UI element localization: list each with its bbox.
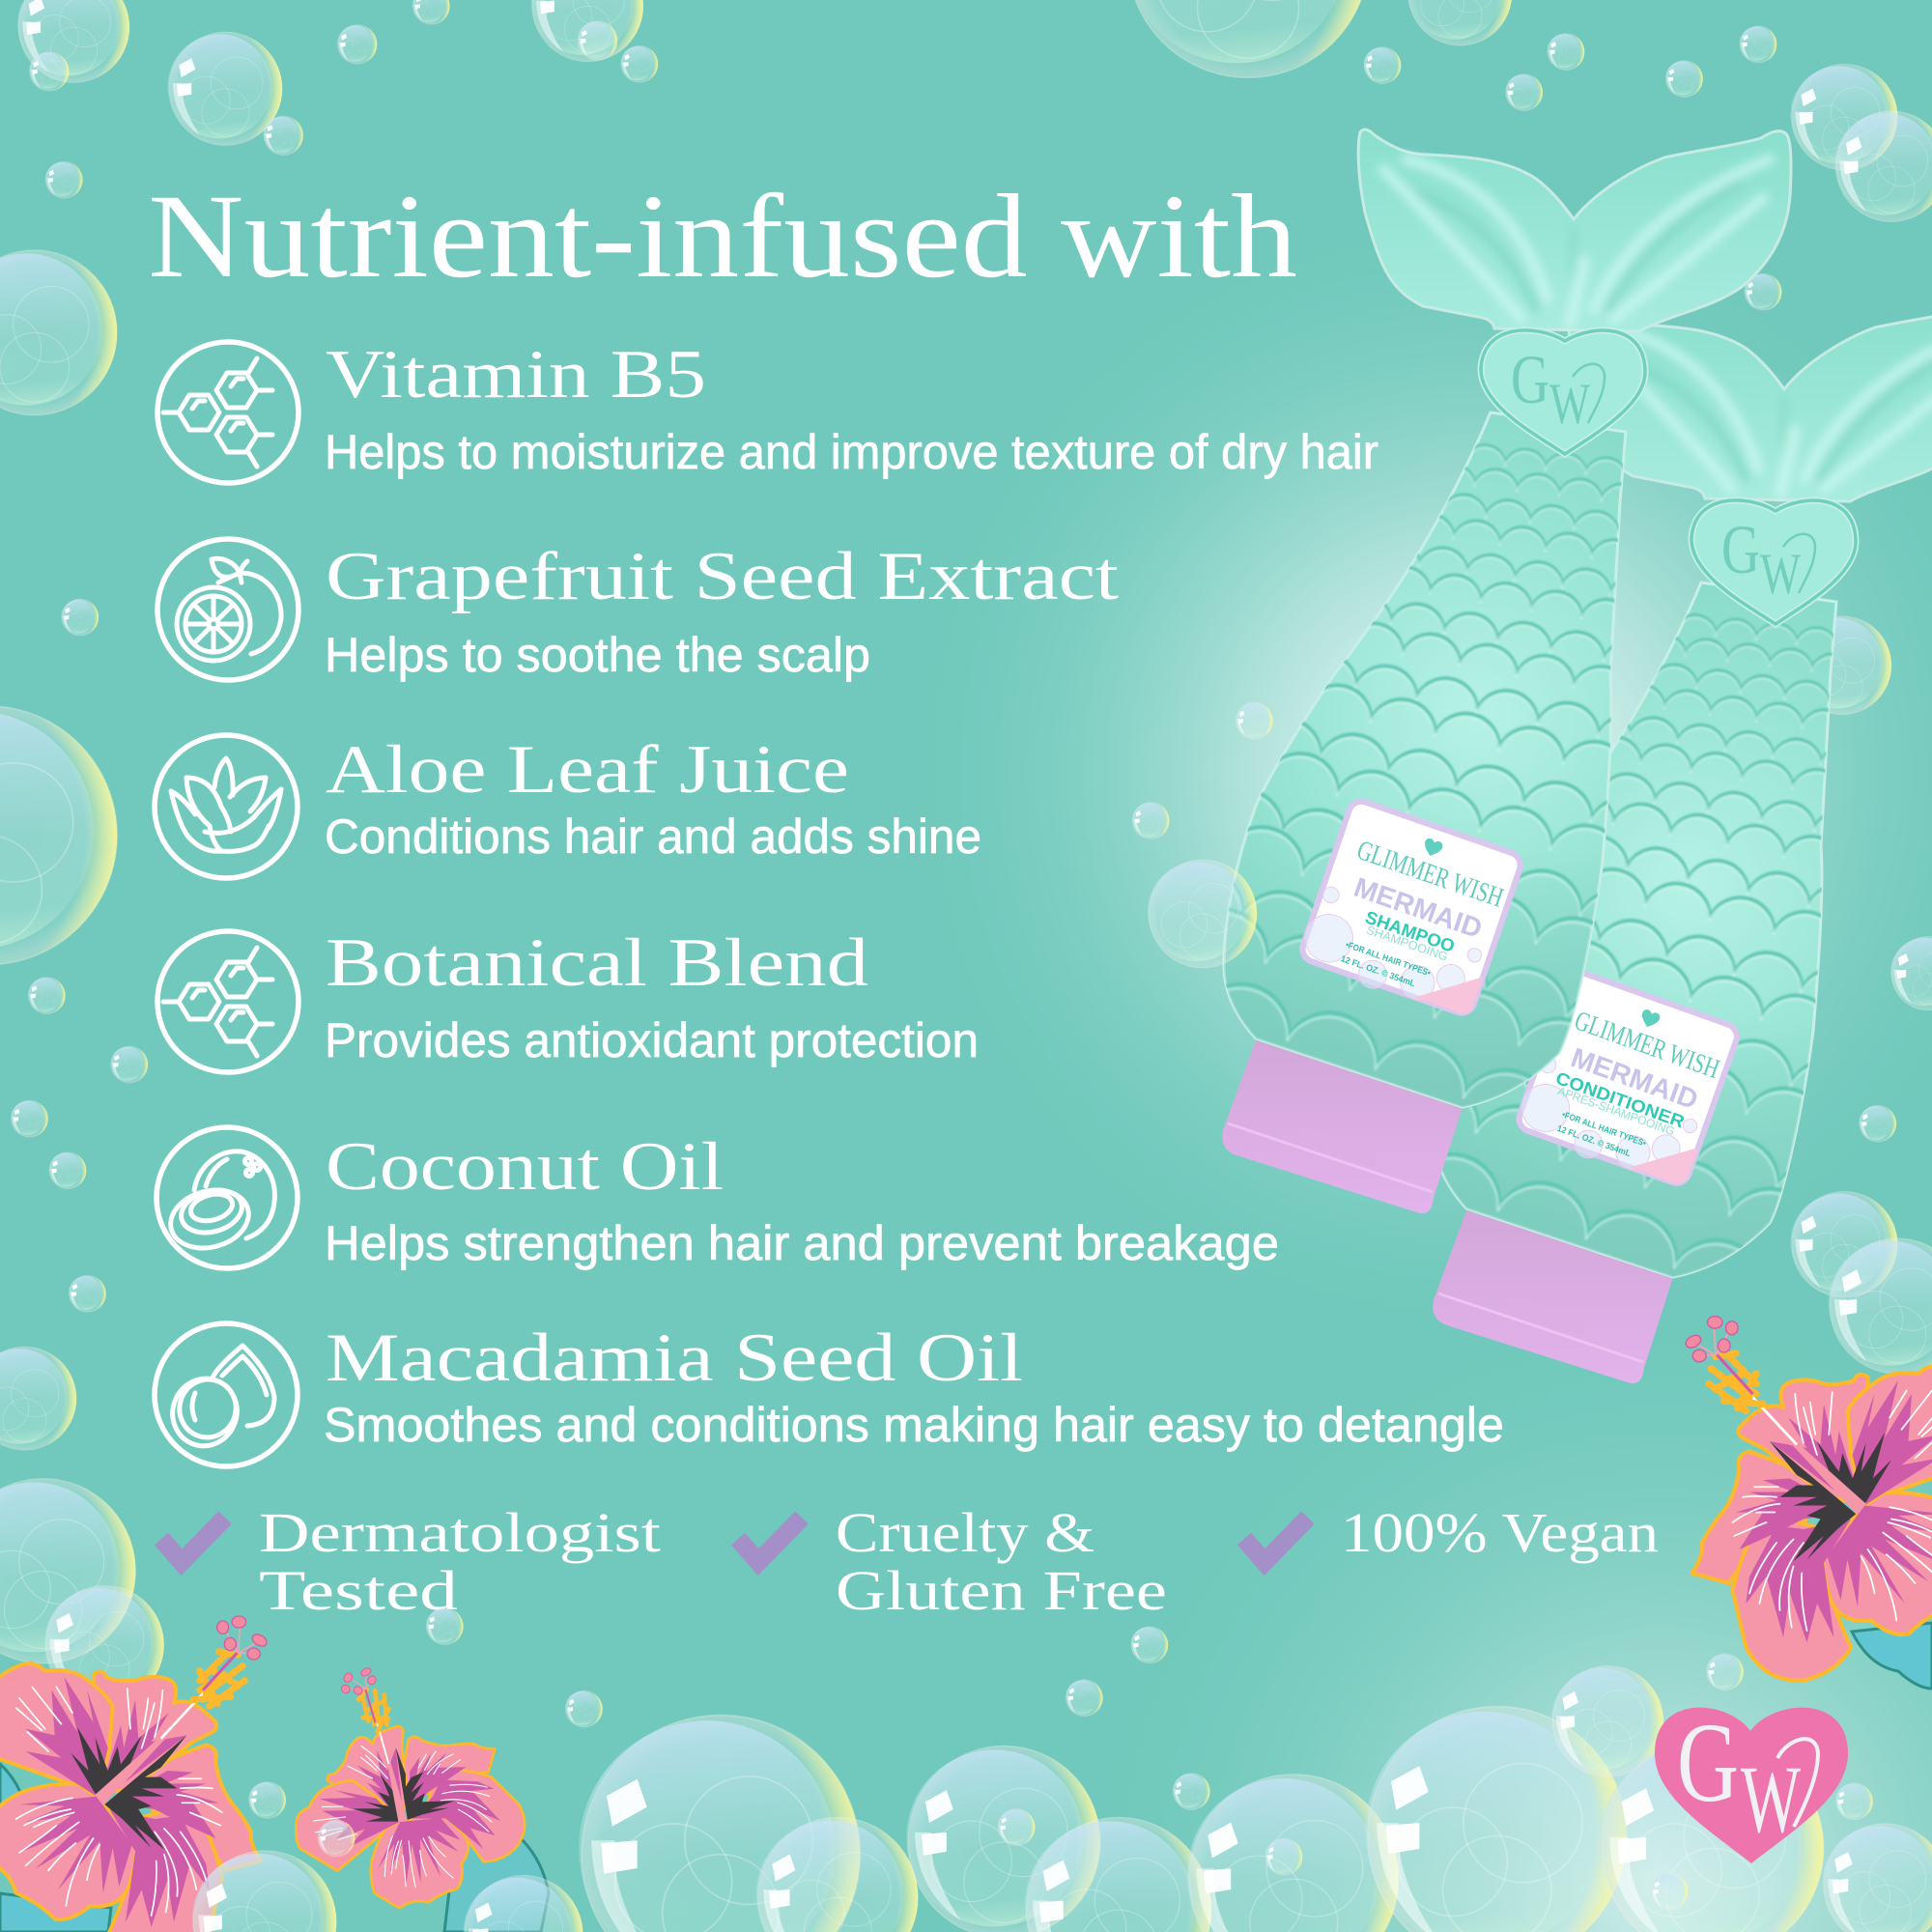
item: macadamia: Smoothes and conditions making hair easy to detangle <box>324 1398 1504 1452</box>
icon: check <box>161 1518 225 1562</box>
claim: cruelty and gluten free: Gluten Free <box>836 1559 1167 1622</box>
conditioner label <box>1512 968 1741 1192</box>
item: grapefruit: Grapefruit Seed Extract <box>326 539 1119 614</box>
conditioner label: MERMAID <box>1567 1042 1702 1116</box>
icon: molecule <box>157 342 298 483</box>
shampoo label: 12 FL. OZ. © 354mL <box>1340 953 1417 988</box>
icon: check <box>738 1518 802 1562</box>
logo: gw heart: G <box>1677 1699 1739 1826</box>
item: botanical blend <box>157 925 979 1072</box>
icon: coconut <box>156 1127 298 1268</box>
shampoo label: SHAMPOOING <box>1365 923 1449 964</box>
claim: dermatologist tested <box>161 1501 661 1622</box>
item: coconut oil: Helps strengthen hair and prevent breakage <box>325 1216 1279 1270</box>
item: vitamin b5: Vitamin B5 <box>326 337 706 412</box>
conditioner label: GLIMMER WISH <box>1571 1006 1723 1085</box>
item: grapefruit <box>157 539 1119 682</box>
item: aloe: Aloe Leaf Juice <box>326 732 849 808</box>
claim: dermatologist tested: Tested <box>259 1559 458 1622</box>
shampoo label <box>1295 797 1523 1022</box>
item: vitamin b5: Helps to moisturize and improve texture of dry hair <box>325 425 1378 479</box>
item: grapefruit: Helps to soothe the scalp <box>325 628 870 682</box>
item: botanical blend: Botanical Blend <box>326 925 868 1001</box>
conditioner label: •FOR ALL HAIR TYPES• <box>1561 1110 1647 1149</box>
icon: grapefruit <box>157 539 298 680</box>
shampoo label: MERMAID <box>1350 872 1486 945</box>
title: Nutrient-infused with <box>148 170 1297 302</box>
conditioner label: APRÈS-SHAMPOOING <box>1556 1083 1677 1138</box>
icon: macadamia <box>155 1323 298 1466</box>
shampoo bottle <box>669 129 1932 1299</box>
claim: vegan <box>1244 1501 1659 1564</box>
logo: gw heart <box>1655 1699 1848 1863</box>
item: vitamin b5 <box>157 337 1378 483</box>
conditioner label: CONDITIONER <box>1553 1067 1688 1132</box>
conditioner label: 12 FL. OZ. © 354mL <box>1556 1123 1633 1158</box>
shampoo label: •FOR ALL HAIR TYPES• <box>1345 940 1432 978</box>
claim: vegan: 100% Vegan <box>1341 1501 1659 1564</box>
claim: dermatologist tested: Dermatologist <box>259 1501 661 1564</box>
shampoo label: GLIMMER WISH <box>1353 835 1507 914</box>
item: coconut oil <box>156 1127 1279 1270</box>
item: aloe: Conditions hair and adds shine <box>325 810 981 864</box>
icon: molecule <box>157 931 298 1072</box>
bubbles along the bottom <box>192 1608 1932 1932</box>
icon: aloe <box>155 735 298 878</box>
flower: right hibiscus <box>1684 1317 1932 1680</box>
icon: check <box>1244 1518 1308 1562</box>
item: macadamia: Macadamia Seed Oil <box>326 1321 1023 1396</box>
conditioner bottle <box>880 299 1932 1469</box>
item: macadamia <box>155 1321 1504 1466</box>
flower: left hibiscus <box>0 1616 269 1932</box>
flower: middle hibiscus <box>257 1659 557 1932</box>
item: coconut oil: Coconut Oil <box>326 1129 724 1205</box>
item: aloe <box>155 732 981 878</box>
item: botanical blend: Provides antioxidant protection <box>325 1013 979 1067</box>
logo: gw heart: W <box>1741 1746 1801 1853</box>
leaves <box>0 1623 1932 1932</box>
claim: cruelty and gluten free: Cruelty & <box>836 1501 1094 1564</box>
claim: cruelty and gluten free <box>738 1501 1167 1622</box>
bubble in front of bottle <box>1148 860 1257 968</box>
shampoo label: SHAMPOO <box>1363 907 1458 956</box>
